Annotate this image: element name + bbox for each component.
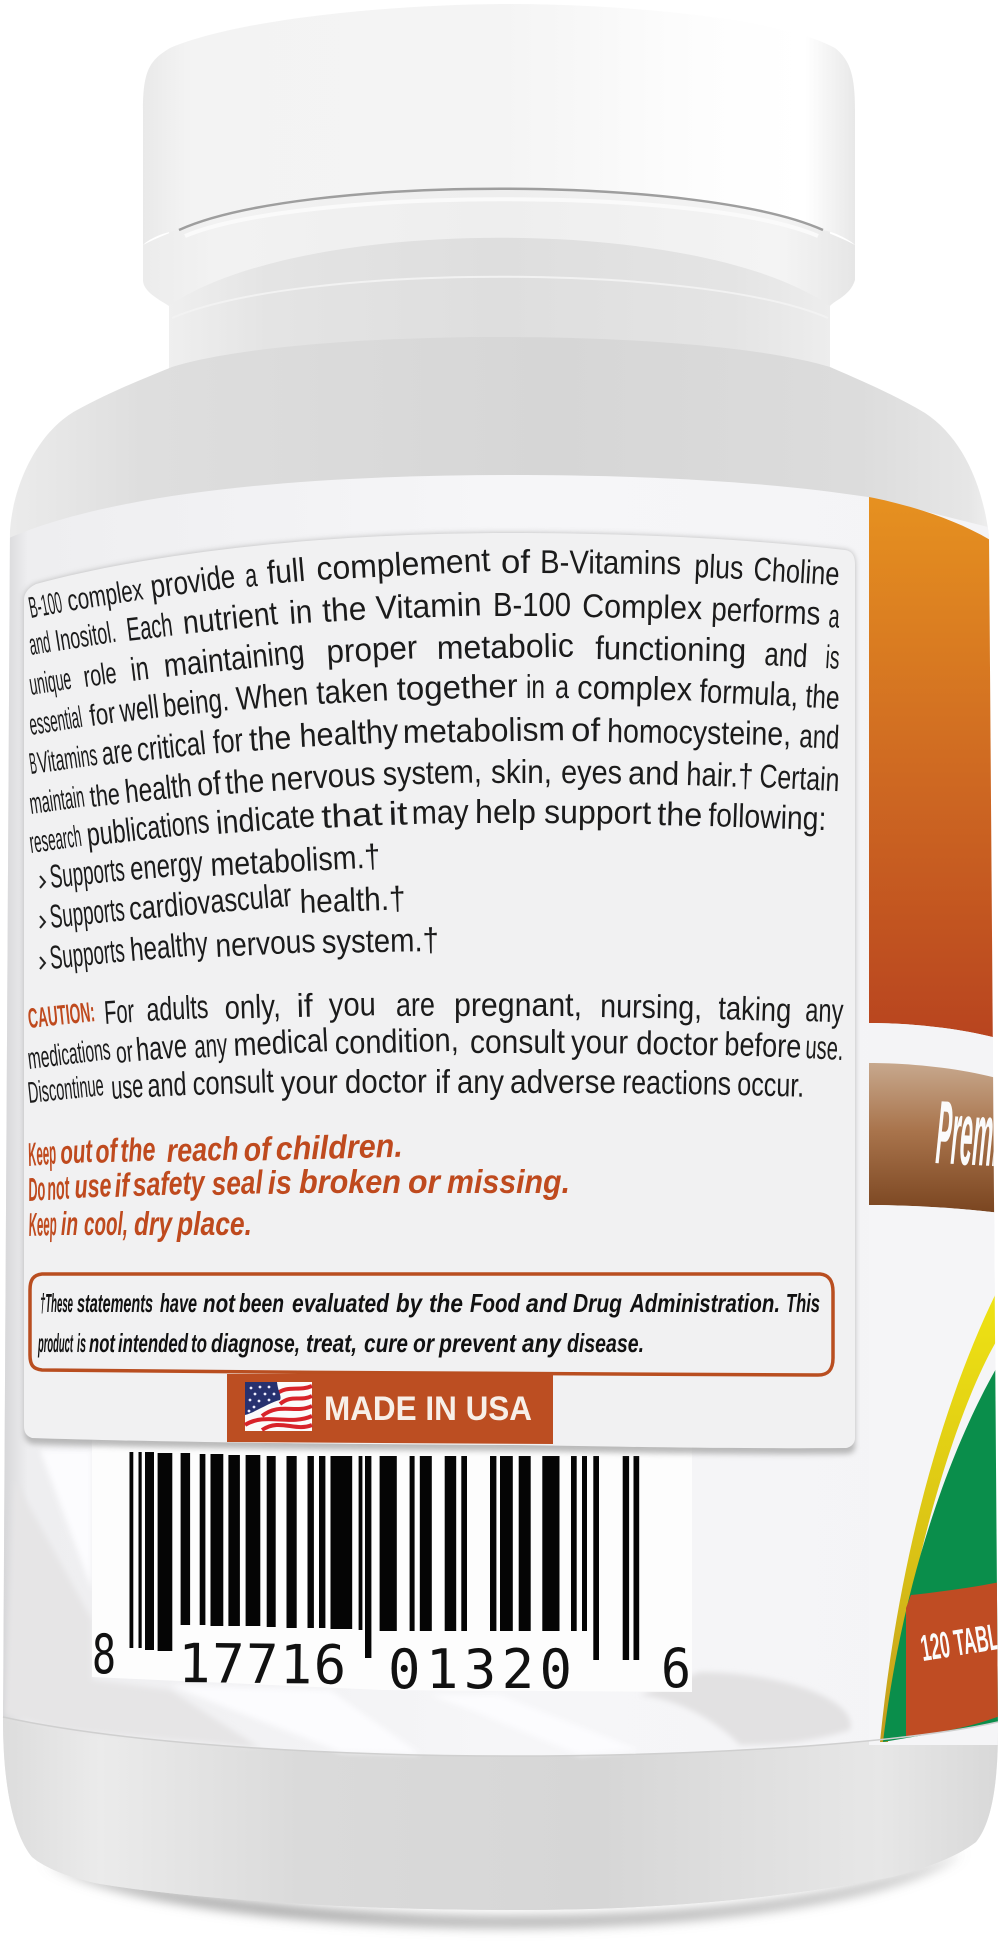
caution paragraph: have [134, 1027, 188, 1068]
intro paragraph: of [195, 764, 223, 803]
intro paragraph: critical [135, 724, 207, 768]
barcode bars [130, 1452, 639, 1660]
intro paragraph: hair.† [686, 755, 754, 794]
white gap band [875, 1023, 992, 1037]
intro paragraph: Vitamin [375, 585, 482, 626]
storage warnings [26, 1127, 570, 1243]
FDA disclaimer box [30, 1274, 833, 1375]
disclaimer line one [40, 1288, 820, 1318]
barcode digits: 01320 [388, 1638, 572, 1701]
caution paragraph: if [435, 1063, 451, 1100]
caution paragraph: and [146, 1065, 187, 1104]
intro paragraph: maintaining [162, 632, 306, 684]
intro paragraph: for [211, 721, 245, 760]
orange tablet count box [906, 1582, 1000, 1737]
intro paragraph: performs [711, 590, 821, 632]
intro paragraph: unique [27, 663, 74, 702]
intro paragraph: metabolic [436, 627, 574, 666]
storage warnings: cool, [84, 1205, 128, 1242]
intro paragraph: complex [65, 573, 145, 618]
disclaimer line two: treat, [306, 1328, 357, 1358]
disclaimer line one: Drug [573, 1288, 622, 1318]
panel shadow [24, 533, 855, 1454]
storage warnings: is [267, 1164, 292, 1201]
disclaimer line one: not [203, 1288, 236, 1318]
caution paragraph: taking [718, 989, 792, 1029]
disclaimer line two: disease. [567, 1328, 644, 1358]
intro paragraph: maintain [27, 781, 86, 821]
panel surface [24, 533, 855, 1448]
intro paragraph: the [321, 589, 367, 629]
bullet: nervous system: nervous [214, 922, 316, 964]
storage warnings: dry [134, 1205, 173, 1242]
intro paragraph: in [128, 649, 151, 688]
intro paragraph: publications [85, 802, 211, 853]
icon: US flag [245, 1382, 312, 1431]
caution paragraph [26, 985, 845, 1110]
intro paragraph: full [265, 551, 306, 591]
bullet: energy metabolism: metabolism.† [209, 837, 381, 883]
intro paragraph: skin, [491, 753, 552, 790]
intro paragraph: the [224, 761, 265, 801]
caution paragraph: CAUTION: [26, 996, 96, 1034]
intro paragraph: B-100 [26, 586, 65, 625]
disclaimer line two: to [191, 1328, 207, 1358]
label panel [24, 533, 855, 1454]
intro paragraph: a [243, 556, 259, 594]
intro paragraph: health [123, 766, 193, 810]
intro paragraph: indicate [215, 796, 316, 841]
caution paragraph: your [280, 1063, 338, 1101]
intro paragraph: eyes [561, 753, 622, 791]
barcode digits: 6 [661, 1637, 691, 1700]
barcode digits: 8 [92, 1623, 116, 1686]
intro paragraph: a [555, 668, 570, 705]
disclaimer line one: †These [40, 1288, 73, 1318]
disclaimer line one: This [786, 1288, 820, 1318]
intro paragraph: a [828, 597, 841, 635]
intro paragraph: homocysteine, [607, 712, 791, 752]
caution paragraph: any [457, 1063, 504, 1100]
cap [143, 4, 855, 245]
intro paragraph: of [501, 543, 531, 580]
intro paragraph: and [799, 717, 840, 756]
intro paragraph: metabolism [402, 710, 565, 750]
cap skirt [143, 185, 855, 306]
bullet: nervous system: Supports [48, 931, 126, 976]
disclaimer line one: by [396, 1288, 423, 1318]
caution paragraph: before [724, 1025, 802, 1065]
storage warnings: of [243, 1130, 274, 1168]
intro paragraph: the [657, 795, 703, 833]
storage warnings: use [73, 1166, 112, 1205]
caution paragraph: medications [26, 1033, 112, 1076]
orange label band [869, 497, 1000, 1039]
caution paragraph: consult [192, 1062, 274, 1102]
intro paragraph: functioning [595, 629, 747, 669]
intro paragraph: research [27, 820, 83, 860]
benefit bullets [40, 837, 439, 976]
disclaimer line two: is [77, 1328, 86, 1358]
caution paragraph: any [193, 1026, 229, 1065]
intro paragraph: that [320, 795, 383, 835]
storage warnings: broken [299, 1163, 401, 1200]
Made in USA badge [227, 1374, 553, 1444]
intro paragraph: the [88, 778, 122, 814]
intro paragraph: B-100 [493, 586, 571, 623]
intro paragraph: may [411, 793, 470, 831]
barcode digits [94, 1632, 688, 1689]
bullet: cardiovascular health: Supports [48, 890, 126, 935]
caution paragraph: nursing, [600, 987, 703, 1026]
intro paragraph: proper [325, 628, 418, 670]
disclaimer line one: and [526, 1288, 568, 1318]
intro paragraph: being. [161, 680, 230, 724]
disclaimer line one: evaluated [292, 1288, 390, 1318]
disclaimer line two: or [413, 1328, 436, 1358]
disclaimer line two: product [38, 1328, 73, 1358]
storage warnings: if [113, 1166, 133, 1204]
storage warnings: not [46, 1168, 71, 1207]
lower label wear marks [5, 1450, 851, 1755]
intro paragraph: B [27, 747, 39, 781]
intro paragraph: of [571, 711, 601, 748]
caution paragraph: consult [470, 1023, 565, 1060]
cap seam [179, 189, 823, 230]
intro paragraph: Vitamins [35, 739, 99, 780]
disclaimer line one: Administration. [629, 1288, 780, 1318]
white lower band [869, 1205, 1000, 1745]
intro paragraph: in [526, 668, 545, 705]
bullet: cardiovascular health [40, 876, 406, 935]
bullet: nervous system: system.† [321, 921, 439, 960]
caution paragraph: For [103, 992, 135, 1031]
barcode [92, 1440, 692, 1701]
disclaimer line two [38, 1328, 644, 1358]
intro paragraph: system, [382, 752, 482, 792]
intro paragraph: following: [708, 796, 827, 837]
intro paragraph: role [81, 657, 119, 694]
intro paragraph: and [27, 626, 53, 662]
brown Premium band [869, 1063, 1000, 1213]
storage warnings: out [59, 1132, 95, 1171]
bullet: nervous system [40, 921, 439, 976]
intro paragraph: well [117, 687, 161, 729]
disclaimer line one: the [429, 1288, 463, 1318]
intro paragraph: formula, [699, 672, 799, 713]
base band [3, 1718, 998, 1895]
caution paragraph: if [296, 987, 314, 1024]
intro paragraph: healthy [298, 712, 400, 754]
disclaimer line two: cure [364, 1328, 408, 1358]
intro paragraph: complex [577, 669, 693, 708]
storage warnings: Keep [26, 1134, 58, 1173]
intro paragraph: it [388, 794, 408, 832]
intro paragraph: in [288, 592, 313, 631]
storage warnings: place. [176, 1205, 252, 1242]
bullet: energy metabolism: Supports [48, 850, 126, 895]
intro paragraph: and [764, 635, 809, 674]
disclaimer line one: statements [77, 1288, 153, 1318]
caution paragraph: use [110, 1067, 144, 1106]
disclaimer line two: intended [118, 1328, 189, 1358]
intro paragraph: for [87, 697, 118, 733]
caution paragraph: adults [145, 988, 209, 1028]
caution paragraph: occur. [737, 1065, 805, 1104]
intro paragraph: Each [124, 606, 175, 648]
intro paragraph: together [396, 667, 518, 707]
disclaimer line one: have [160, 1288, 197, 1318]
bullet: nervous system: healthy [128, 924, 210, 968]
caution paragraph: condition, [334, 1021, 459, 1061]
intro paragraph: Complex [582, 587, 703, 626]
barcode digits: 17716 [178, 1632, 347, 1697]
intro paragraph: and [628, 754, 680, 792]
caution paragraph: are [396, 986, 435, 1023]
box outline [30, 1274, 833, 1375]
intro paragraph: are [99, 731, 135, 772]
badge text: MADE IN USA [324, 1390, 532, 1428]
storage warnings: Do [27, 1170, 46, 1208]
caution paragraph: your [571, 1023, 628, 1060]
intro paragraph: B-Vitamins [540, 543, 681, 581]
caution paragraph: reactions [622, 1063, 732, 1102]
disclaimer line two: diagnose, [211, 1328, 300, 1358]
storage warnings: Keep [28, 1205, 57, 1243]
intro paragraph: taken [315, 670, 389, 711]
bottle bottom shadow [45, 1852, 962, 1926]
caution paragraph: doctor [345, 1062, 427, 1100]
disclaimer line two: not [89, 1328, 116, 1358]
yellow swoosh [880, 1285, 1000, 1742]
storage warnings: children. [275, 1127, 403, 1167]
groove line under label [3, 1717, 998, 1756]
storage warnings: in [61, 1205, 78, 1242]
intro paragraph: nutrient [181, 594, 279, 641]
storage warnings: safety [132, 1163, 206, 1203]
intro paragraph: the [805, 677, 841, 716]
storage warnings: seal [211, 1163, 264, 1202]
intro paragraph [26, 541, 841, 860]
intro paragraph: plus [694, 547, 744, 586]
intro paragraph: provide [148, 557, 237, 605]
intro paragraph: support [544, 793, 651, 831]
storage warnings: reach [166, 1130, 239, 1169]
barcode background [92, 1440, 692, 1692]
storage warnings: or [408, 1163, 442, 1200]
storage warnings: of [94, 1131, 121, 1170]
intro paragraph: Choline [753, 550, 841, 592]
caution paragraph: or [114, 1035, 135, 1070]
bullet: energy metabolism: energy [128, 844, 205, 887]
disclaimer line two: prevent [438, 1328, 517, 1358]
intro paragraph: When [235, 674, 309, 717]
bottle neck [169, 230, 830, 375]
intro paragraph: nervous [269, 755, 376, 798]
clear outer label [3, 475, 1000, 1756]
disclaimer line two: any [522, 1328, 562, 1358]
caution paragraph: Discontinue [26, 1069, 105, 1110]
caution paragraph: pregnant, [454, 986, 582, 1023]
caution paragraph: you [328, 985, 376, 1023]
intro paragraph: essential [27, 701, 84, 742]
neck line [172, 277, 828, 318]
storage warnings: the [119, 1130, 156, 1169]
bullet: cardiovascular health: health.† [299, 879, 406, 920]
caution paragraph: doctor [636, 1024, 719, 1062]
green panel [883, 1362, 1000, 1742]
bullet: cardiovascular health: cardiovascular [127, 876, 293, 927]
disclaimer line one: Food [470, 1288, 521, 1318]
disclaimer line one: been [239, 1288, 284, 1318]
intro paragraph: complement [315, 541, 491, 587]
storage warnings: missing. [447, 1163, 570, 1200]
caution paragraph: adverse [510, 1063, 616, 1100]
bullet: energy metabolism [40, 837, 381, 895]
intro paragraph: Certain [759, 757, 840, 798]
intro paragraph: Inositol. [53, 616, 118, 658]
intro paragraph: help [475, 793, 536, 830]
caution paragraph: medical [232, 1021, 329, 1063]
caution paragraph: any [805, 991, 844, 1029]
intro paragraph: the [248, 718, 292, 758]
caution paragraph: use. [805, 1028, 845, 1067]
intro paragraph: is [825, 638, 841, 676]
caution paragraph: only, [224, 987, 281, 1026]
